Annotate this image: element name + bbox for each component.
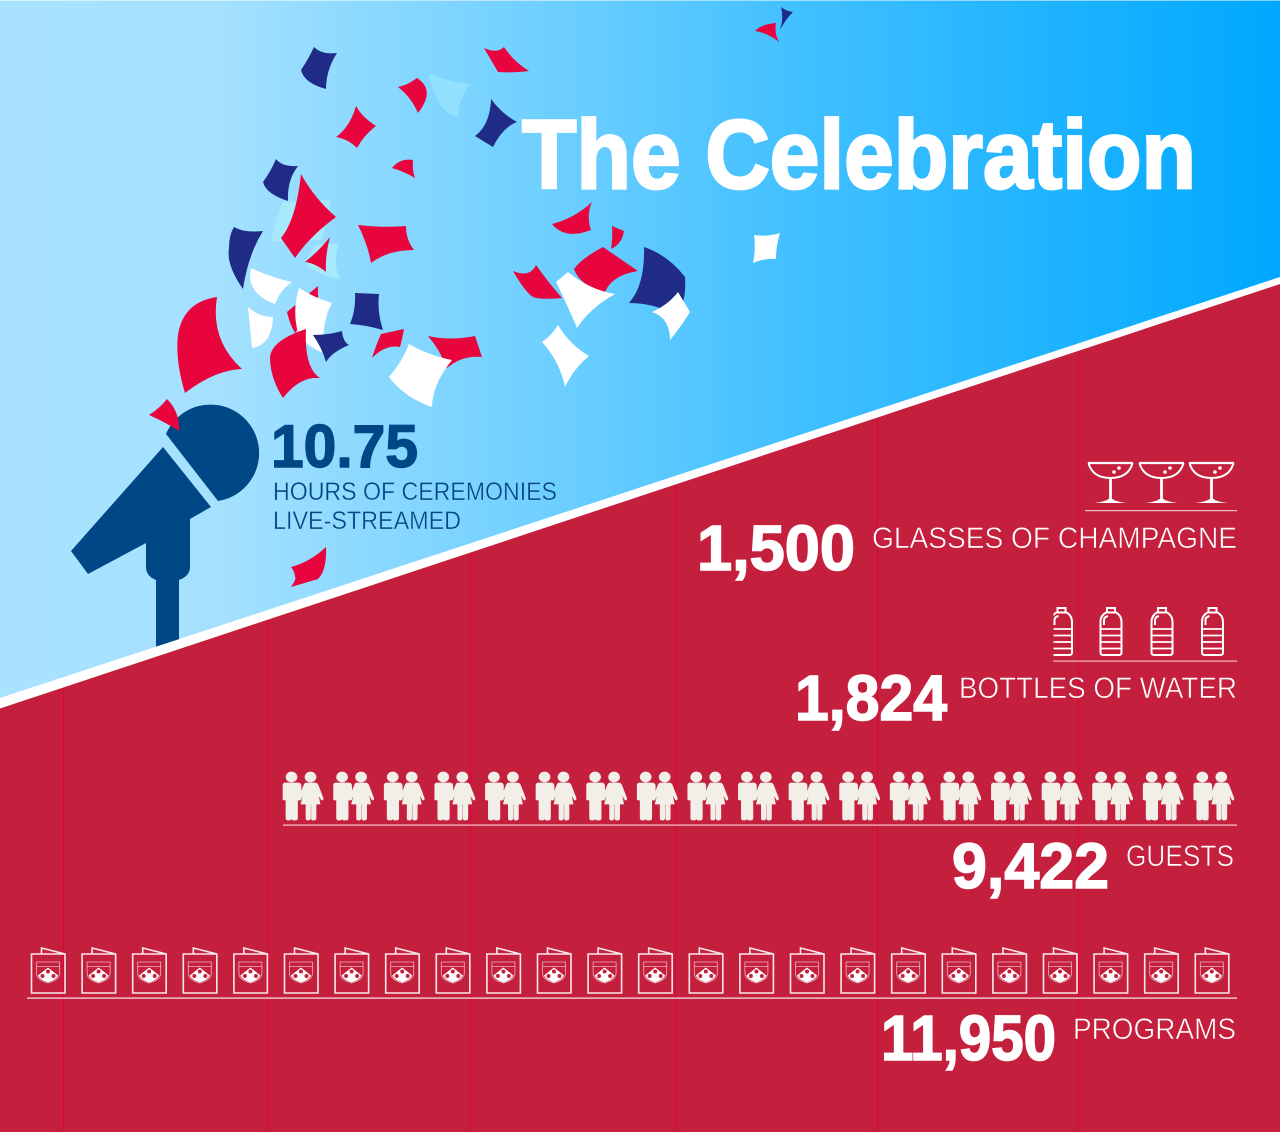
stat: glasses of champagne	[697, 463, 1237, 584]
title: The Celebration	[522, 100, 1196, 209]
rule	[283, 824, 1237, 826]
stat: hours live-streamed	[271, 413, 557, 535]
number: 9,422: 9,422	[952, 830, 1109, 902]
stat: bottles of water	[795, 608, 1237, 734]
icons: guest couples	[283, 772, 1234, 820]
icons: champagne glasses	[1088, 463, 1234, 503]
rule	[1085, 510, 1237, 511]
label: programs: PROGRAMS	[1073, 1013, 1236, 1046]
confetti piece on microphone	[149, 399, 179, 431]
stat: programs	[27, 948, 1237, 1074]
label: guests: GUESTS	[1126, 840, 1234, 873]
label: hours of ceremonies: HOURS OF CEREMONIES	[273, 478, 557, 506]
icon: microphone	[71, 405, 259, 660]
number: 1,500: 1,500	[697, 512, 855, 584]
icons: water bottles	[1051, 608, 1223, 655]
label: bottles of water: BOTTLES OF WATER	[959, 672, 1237, 705]
red lower panel	[0, 284, 1280, 1132]
number: 11,950: 11,950	[881, 1002, 1056, 1074]
number: 10.75: 10.75	[271, 413, 418, 480]
rule	[27, 998, 1237, 999]
label: glasses of champagne: GLASSES OF CHAMPAGNE	[872, 522, 1237, 555]
icons: printed programs	[32, 948, 1229, 993]
stat: guests	[283, 772, 1237, 902]
diagonal white band	[0, 277, 1280, 712]
confetti burst	[177, 7, 793, 587]
panel vertical stripes	[64, 352, 1078, 1132]
confetti: left cluster	[177, 47, 529, 587]
number: 1,824: 1,824	[795, 662, 947, 734]
sky gradient background	[0, 0, 1280, 720]
label: live-streamed: LIVE-STREAMED	[273, 507, 461, 535]
rule	[1053, 660, 1237, 662]
confetti: right cluster	[513, 7, 793, 387]
